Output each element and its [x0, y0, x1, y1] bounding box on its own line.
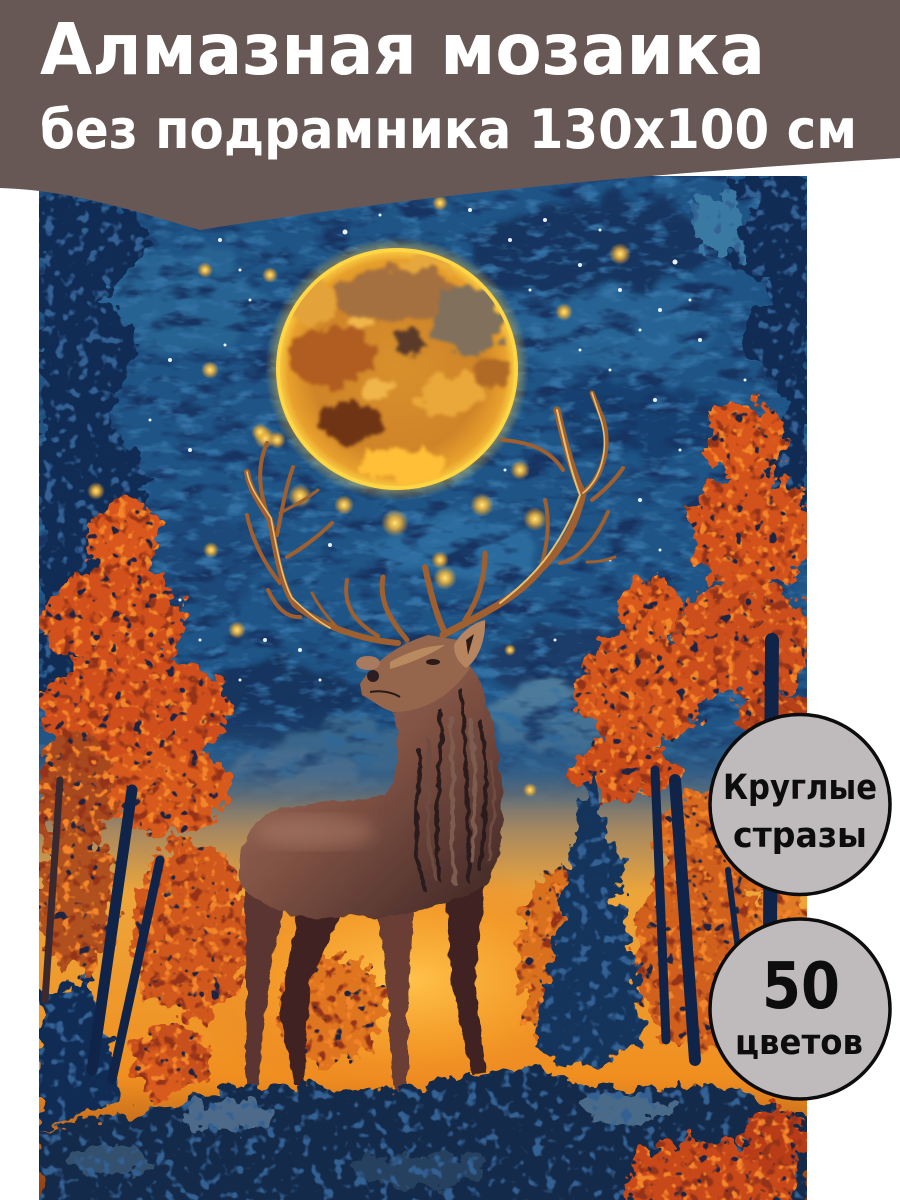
deer ear	[454, 620, 485, 668]
badge: 50 colours: цветов	[735, 1023, 863, 1063]
title: Алмазная мозаика	[40, 8, 765, 91]
badge: 50 colours	[710, 919, 890, 1099]
deer face highlight	[390, 645, 445, 669]
night sky background	[39, 176, 807, 1200]
deer body highlight	[255, 816, 375, 848]
deer body and neck	[239, 665, 503, 918]
subtitle: без подрамника 130x100 см	[40, 98, 857, 161]
dark pines top corners	[39, 176, 807, 1130]
horizon glow	[276, 886, 532, 1047]
glowing fireflies	[88, 196, 630, 796]
badge: 50 colours: 50	[762, 950, 840, 1024]
painting: deer under the moon	[33, 176, 820, 1200]
deer antlers	[247, 393, 623, 643]
deer head	[360, 635, 470, 712]
stars	[148, 198, 746, 682]
badge: round rhinestones	[710, 714, 890, 894]
moon	[265, 237, 529, 501]
deer	[239, 620, 503, 1092]
orange autumn trees left	[33, 495, 385, 1094]
badge: round rhinestones: стразы	[733, 816, 867, 856]
badge: round rhinestones: Круглые	[723, 768, 877, 808]
rocky ground	[39, 1065, 807, 1200]
dark pine tree	[535, 770, 645, 1070]
deer legs	[245, 880, 486, 1092]
header banner	[0, 0, 900, 230]
orange foliage bottom	[138, 1047, 805, 1200]
deer mane	[417, 690, 494, 890]
orange autumn trees right	[518, 402, 820, 1060]
